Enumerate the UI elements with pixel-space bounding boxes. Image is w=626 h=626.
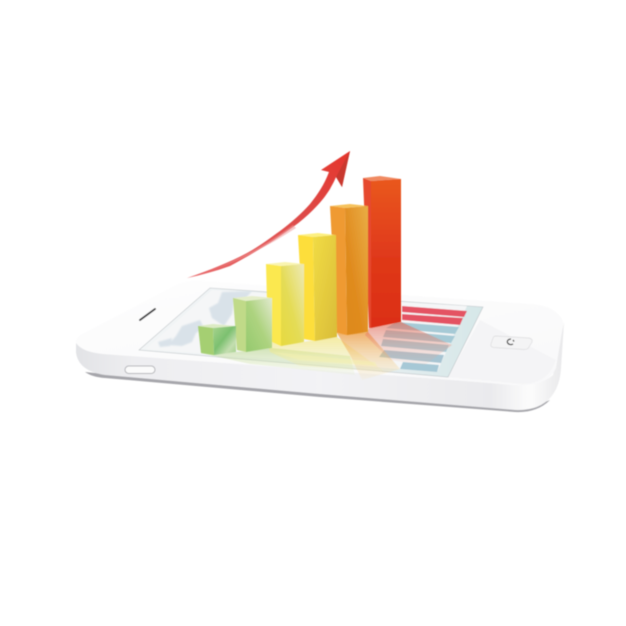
bar 2: green (233, 296, 272, 352)
bar 6: red (363, 176, 401, 328)
inner white screen area (146, 290, 467, 372)
glare on phone (448, 320, 556, 384)
screen bar chart (379, 306, 467, 372)
bar 4: yellow (298, 233, 337, 341)
screen (139, 288, 483, 377)
speaker (140, 309, 155, 320)
bar reflections (201, 322, 452, 380)
phone top face (76, 280, 563, 385)
bar 5: orange (330, 204, 368, 335)
bar chart 3D (198, 176, 401, 355)
arrow (187, 151, 350, 278)
phone shadow edge (85, 372, 550, 412)
phone (76, 280, 564, 412)
bar 3: pale yellow (266, 262, 304, 346)
phone side band (76, 322, 564, 410)
side button (125, 366, 155, 374)
bar 1: small green (198, 324, 236, 355)
world map (158, 291, 252, 347)
home button (491, 336, 532, 350)
